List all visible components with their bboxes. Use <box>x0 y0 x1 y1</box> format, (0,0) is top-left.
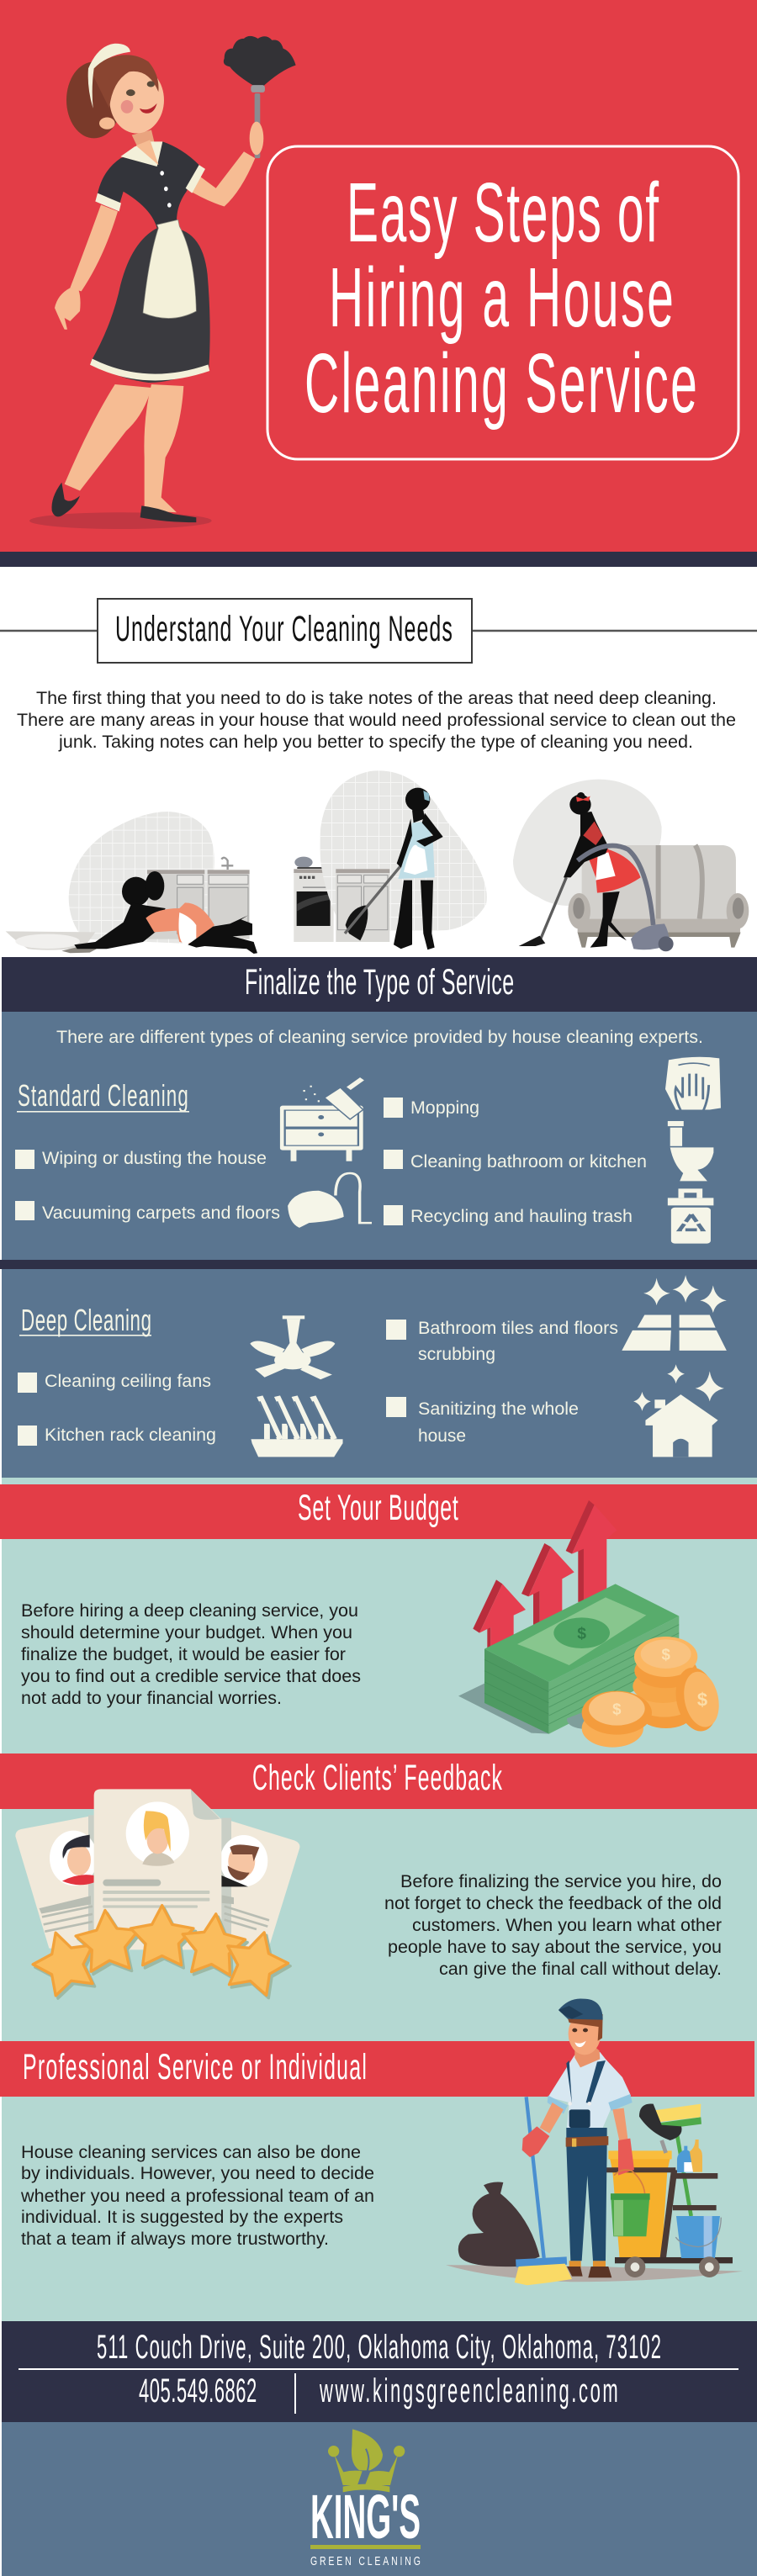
text block: professional: House cleaning services can also be done <box>21 2142 361 2162</box>
illustration: woman sweeping the kitchen <box>320 770 487 949</box>
illustration: cleaner with cart <box>446 1998 743 2285</box>
subheading: deep cleaning: Deep Cleaning <box>21 1304 151 1337</box>
panel: check clients' feedback <box>0 1753 757 2041</box>
illustration: money and growth arrows: $ <box>577 1625 586 1642</box>
illustration: money and growth arrows: $ <box>697 1689 707 1710</box>
list: standard right: Cleaning bathroom or kitchen <box>410 1151 647 1172</box>
icon: dish rack <box>251 1396 343 1457</box>
text block: budget: Before hiring a deep cleaning service, you <box>21 1600 358 1621</box>
heading: professional service or individual: Professional Service or Individual <box>23 2047 367 2087</box>
panel: set your budget <box>0 1478 757 1753</box>
heading: finalize the type of service: Finalize the Type of Service <box>245 962 514 1002</box>
text: intro to service types: There are different types of cleaning service provided by house cleaning experts. <box>56 1027 703 1047</box>
text block: budget: finalize the budget, it would be easier for <box>21 1644 346 1664</box>
illustration: woman vacuuming a sofa <box>513 780 749 951</box>
title box <box>267 146 738 459</box>
text block: budget: not add to your financial worries. <box>21 1688 282 1708</box>
list: deep left: Kitchen rack cleaning <box>45 1425 216 1445</box>
illustration: woman scrubbing the floor <box>6 812 334 954</box>
heading: set your budget: Set Your Budget <box>298 1488 458 1528</box>
text block: intro: The first thing that you need to do is take notes of the areas that need deep cleaning. <box>36 688 717 708</box>
text block: professional <box>20 2142 374 2249</box>
list: deep right: scrubbing <box>418 1344 495 1364</box>
heading: understand your cleaning needs <box>0 599 757 663</box>
list: deep left <box>18 1371 216 1446</box>
icon: toilet <box>668 1121 713 1181</box>
list: standard left: Wiping or dusting the house <box>42 1148 267 1168</box>
list: standard left: Vacuuming carpets and floors <box>42 1203 280 1223</box>
illustration: money and growth arrows <box>458 1500 723 1748</box>
list: deep right: Bathroom tiles and floors <box>418 1318 618 1338</box>
text block: feedback: people have to say about the service, you <box>388 1937 722 1957</box>
text block: professional: individual. It is suggested by the experts <box>21 2207 343 2227</box>
panel: professional service or individual <box>0 1998 757 2321</box>
heading: understand your cleaning needs: Understand Your Cleaning Needs <box>115 609 453 649</box>
heading: finalize the type of service <box>2 957 757 1012</box>
text block: budget: should determine your budget. When you <box>21 1622 352 1642</box>
illustration: review documents and stars <box>15 1789 299 2002</box>
text: address: 511 Couch Drive, Suite 200, Oklahoma City, Oklahoma, 73102 <box>97 2328 661 2366</box>
panel: hero <box>0 0 757 567</box>
subheading: standard cleaning: Standard Cleaning <box>18 1080 188 1113</box>
text block: feedback: can give the final call without delay. <box>439 1959 722 1979</box>
text block: feedback <box>384 1871 722 1979</box>
text block: intro <box>17 688 736 752</box>
panel: logo area <box>2 2422 757 2576</box>
list: deep right: house <box>418 1426 466 1446</box>
title: Hiring a House <box>329 251 674 345</box>
icon: shiny floor <box>622 1275 727 1351</box>
logo: King's Green Cleaning: KING'S <box>310 2482 421 2552</box>
title: Cleaning Service <box>304 336 697 431</box>
illustration: maid with feather duster <box>29 36 296 529</box>
text block: intro: junk. Taking notes can help you better to specify the type of cleaning you need. <box>58 732 693 752</box>
icon: recycling bin <box>668 1188 713 1244</box>
panel: contact footer <box>2 2321 757 2422</box>
panel: standard cleaning <box>2 1012 757 1260</box>
title: Easy Steps of <box>347 166 659 260</box>
list: deep right: Sanitizing the whole <box>418 1399 579 1419</box>
text: phone: 405.549.6862 <box>139 2372 257 2409</box>
icon: hand with cloth <box>665 1057 721 1117</box>
text block: feedback: customers. When you learn what other <box>412 1915 722 1935</box>
illustration: money and growth arrows: $ <box>612 1700 622 1717</box>
text block: feedback: not forget to check the feedback of the old <box>384 1893 722 1913</box>
logo: King's Green Cleaning <box>310 2429 421 2568</box>
icon: ceiling fan <box>250 1315 335 1379</box>
text block: professional: by individuals. However, you need to decide <box>21 2163 374 2183</box>
logo: King's Green Cleaning: GREEN CLEANING <box>310 2553 421 2568</box>
list: standard right: Recycling and hauling trash <box>410 1206 633 1226</box>
heading: check clients' feedback: Check Clients’ Feedback <box>252 1758 502 1798</box>
title <box>304 166 697 431</box>
list: deep left: Cleaning ceiling fans <box>45 1371 211 1391</box>
text block: professional: whether you need a professional team of an <box>20 2186 374 2206</box>
icon: clean house <box>633 1364 724 1457</box>
list: standard right <box>384 1098 647 1226</box>
text block: professional: that a team if always more trustworthy. <box>21 2229 329 2249</box>
text block: budget: you to find out a credible service that does <box>21 1666 361 1686</box>
illustration: money and growth arrows: $ <box>661 1645 670 1663</box>
panel: deep cleaning <box>0 1260 757 1478</box>
list: standard left <box>15 1148 280 1223</box>
text block: feedback: Before finalizing the service you hire, do <box>400 1871 722 1891</box>
text block: intro: There are many areas in your house that would need professional service to clean out the <box>17 710 736 730</box>
icon: vacuum <box>288 1173 372 1228</box>
text: website: www.kingsgreencleaning.com <box>319 2372 618 2409</box>
list: standard right: Mopping <box>410 1098 479 1118</box>
text block: budget <box>21 1600 361 1708</box>
list: deep right <box>386 1318 618 1446</box>
icon: dresser and brush <box>280 1079 363 1161</box>
